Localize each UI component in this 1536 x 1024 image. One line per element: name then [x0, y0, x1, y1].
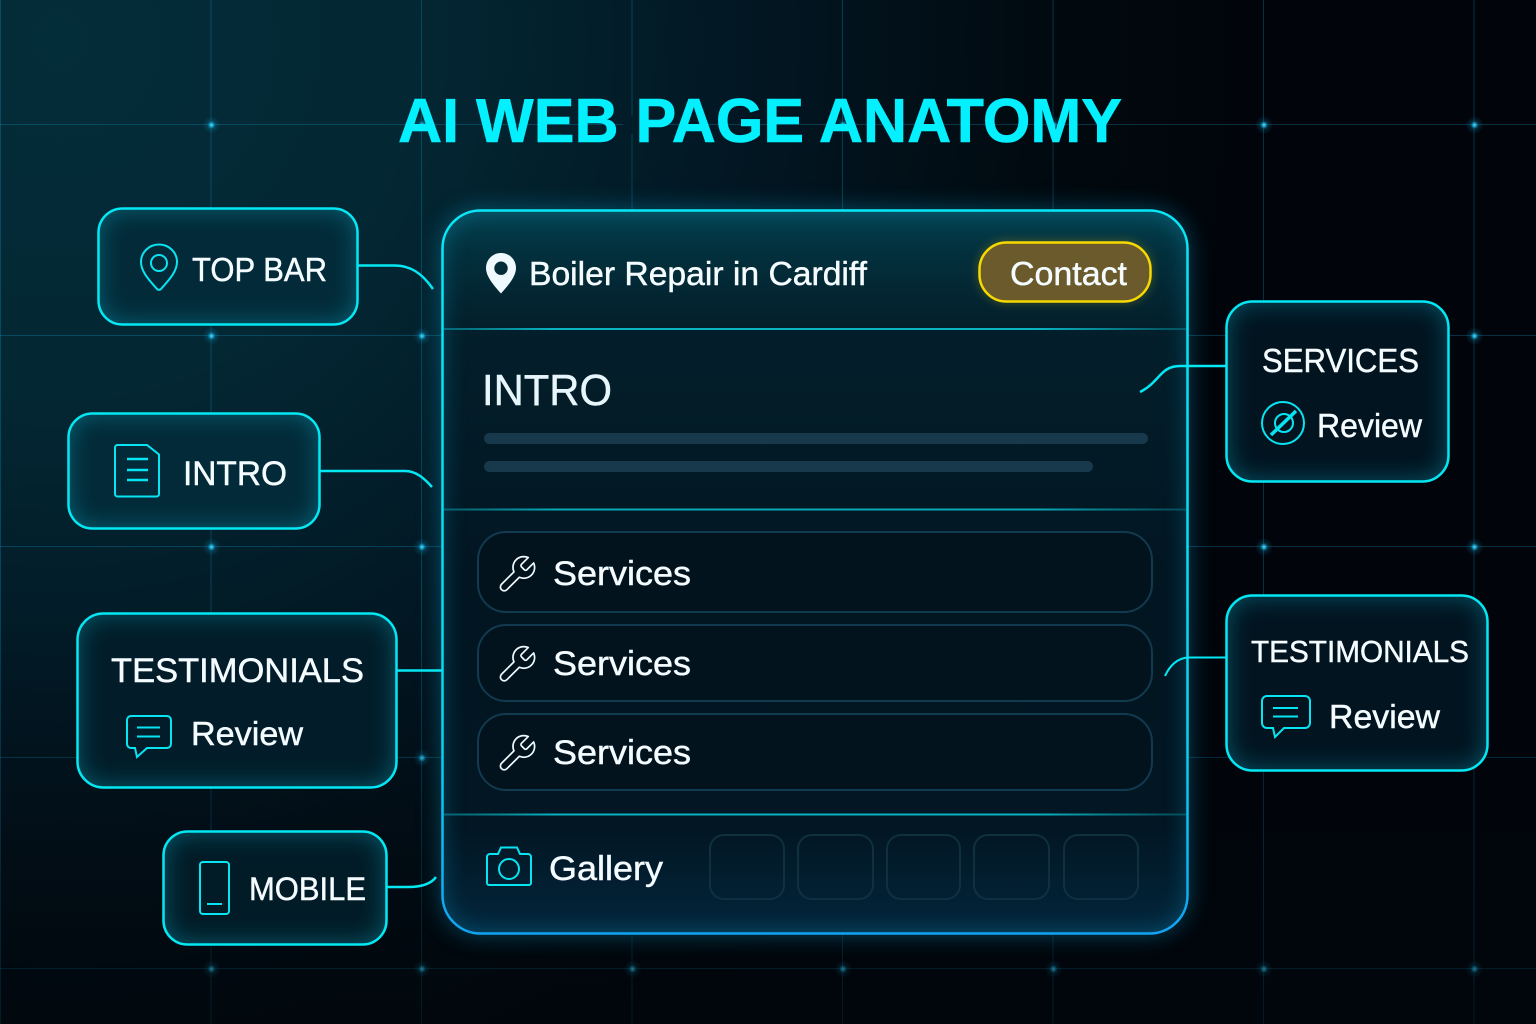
callout: top bar: TOP BAR [192, 251, 327, 288]
icon: camera [487, 848, 531, 885]
callout: testimonials left [77, 613, 397, 788]
icon: wrench [500, 736, 535, 770]
icon: chat bubble [1262, 696, 1310, 737]
callout: services [1226, 301, 1449, 482]
arrow: testimonials right connector [1165, 658, 1226, 676]
gallery thumbnails [710, 835, 1138, 899]
arrow: services connector [1140, 366, 1226, 392]
callout: top bar [98, 208, 358, 325]
callout: intro [68, 413, 320, 529]
panel: web page mockup [442, 210, 1188, 934]
top bar text: Boiler Repair in Cardiff [529, 255, 868, 292]
services row 1: Services [553, 555, 691, 593]
gallery label: Gallery [549, 850, 663, 888]
callout: testimonials left: Review [191, 715, 303, 752]
icon: compass [1262, 402, 1304, 444]
icon: chat bubble [127, 716, 171, 757]
arrow: mobile connector [387, 877, 436, 887]
top bar: location heading [486, 253, 868, 294]
services row 1 [478, 532, 1152, 612]
services row 3 [478, 714, 1152, 790]
icon: wrench [500, 557, 535, 591]
callout: mobile [163, 831, 387, 945]
services row 2: Services [553, 645, 691, 683]
icon: document [115, 445, 159, 496]
callout: mobile: MOBILE [249, 871, 366, 907]
callout: intro: INTRO [183, 455, 287, 493]
icon: white location pin [486, 253, 516, 294]
callout: services: SERVICES [1262, 342, 1419, 379]
contact button [980, 242, 1150, 302]
services row 3: Services [553, 734, 691, 772]
callout: testimonials right: Review [1329, 698, 1440, 735]
arrow: top bar connector [358, 266, 433, 289]
services row 2 [478, 625, 1152, 701]
icon: map pin [141, 244, 177, 290]
title: AI WEB PAGE ANATOMY [398, 87, 1122, 156]
icon: wrench [500, 647, 535, 681]
icon: smartphone [200, 862, 229, 914]
callout: testimonials right [1226, 595, 1488, 771]
callout: services: Review [1317, 407, 1422, 444]
intro text placeholder lines [484, 433, 1148, 472]
callout: testimonials right: TESTIMONIALS [1251, 634, 1469, 669]
intro heading: INTRO [482, 366, 612, 415]
arrow: intro connector [320, 471, 432, 487]
intro section [482, 366, 1148, 472]
arrow: testimonials left connector [397, 669, 442, 672]
contact button: Contact [1010, 255, 1127, 292]
gallery label [487, 848, 663, 888]
callout: testimonials left: TESTIMONIALS [111, 652, 364, 690]
